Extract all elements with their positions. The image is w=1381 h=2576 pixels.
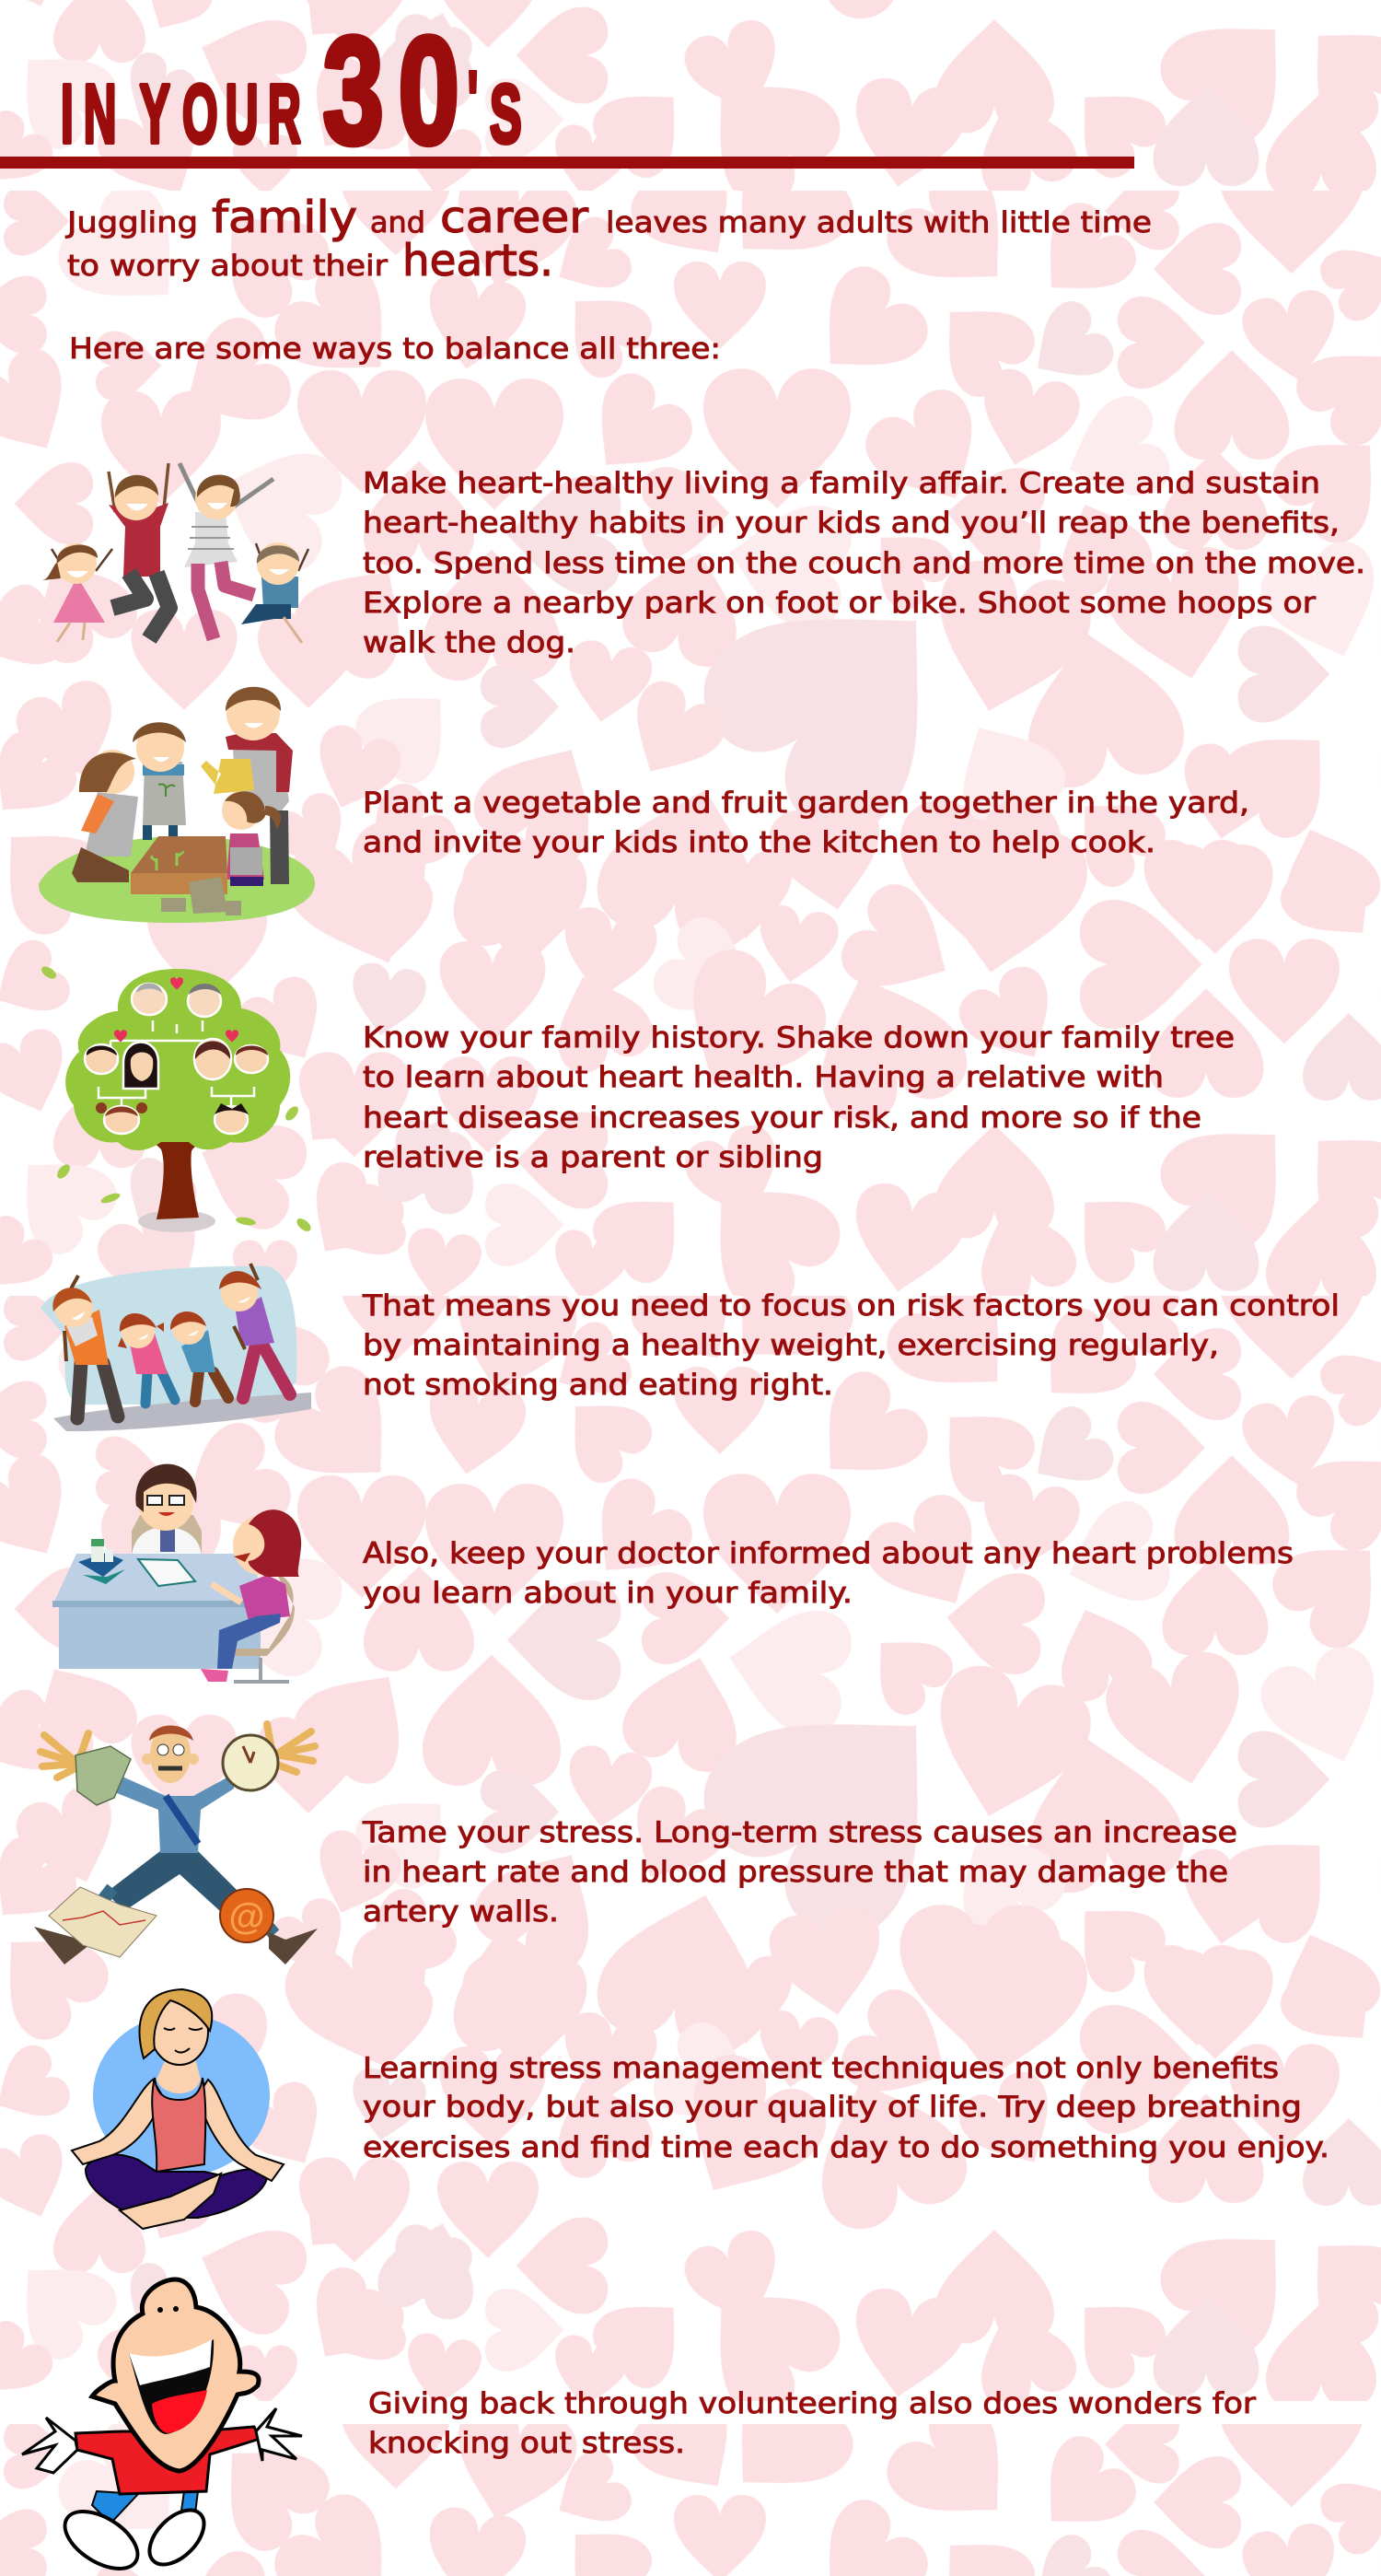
father bbox=[109, 463, 169, 639]
patient bbox=[201, 1509, 301, 1682]
girl bbox=[118, 1313, 175, 1404]
shoes bbox=[34, 1927, 89, 1964]
text: family affair: Explore a nearby park on foot or bike. Shoot some hoops or bbox=[363, 587, 1316, 620]
at sign badge: @ bbox=[228, 1896, 265, 1937]
clipboard bbox=[138, 1559, 195, 1586]
tank top bbox=[152, 2078, 205, 2172]
text: stress management bbox=[363, 2052, 1329, 2164]
father with watering can bbox=[226, 687, 293, 884]
icon: meditating woman bbox=[72, 1989, 284, 2229]
shirt and arms bbox=[75, 2427, 260, 2494]
text: family history: Know your family history. Shake down your family tree bbox=[363, 1021, 1235, 1055]
text: family affair: heart-healthy habits in your kids and you’ll reap the benefits, bbox=[363, 507, 1340, 540]
intro text: family bbox=[212, 192, 357, 243]
intro text: Here are some ways to balance all three: bbox=[69, 332, 721, 366]
nose bbox=[157, 2307, 163, 2313]
falling leaves bbox=[40, 964, 313, 1234]
father bbox=[52, 1276, 118, 1418]
hands bbox=[22, 2408, 302, 2473]
mother bbox=[219, 1264, 290, 1398]
woman kneeling bbox=[72, 750, 138, 882]
text: risk factors: not smoking and eating right. bbox=[363, 1369, 833, 1402]
head bbox=[142, 1726, 199, 1783]
text: risk factors: That means you need to focus on risk factors you can control bbox=[362, 1289, 1340, 1323]
text: volunteering: Giving back through volunteering also does wonders for bbox=[368, 2387, 1256, 2420]
intro text: Juggling bbox=[65, 206, 198, 239]
mouth bbox=[129, 2339, 214, 2434]
clock bbox=[223, 1735, 278, 1790]
boy bbox=[170, 1311, 228, 1402]
watering can bbox=[201, 759, 254, 794]
text: family affair: too. Spend less time on the couch and more time on the move. bbox=[363, 547, 1365, 580]
text: stress bbox=[362, 1816, 1237, 1929]
text: risk factors: by maintaining a healthy weight, exercising regularly, bbox=[363, 1329, 1219, 1362]
boy with seedling bbox=[133, 722, 186, 840]
family tree faces bbox=[85, 984, 268, 1134]
text: family affair: Make heart-healthy living a family affair. Create and sustain bbox=[363, 467, 1320, 500]
text: doctor: you learn about in your family. bbox=[363, 1577, 853, 1610]
icon: family tree bbox=[40, 964, 313, 1234]
title rule bbox=[0, 157, 1134, 169]
neck and shoulders bbox=[157, 2058, 201, 2093]
text: family affair: walk the dog. bbox=[363, 626, 575, 659]
text: family history: heart disease increases your risk, and more so if the bbox=[363, 1102, 1201, 1135]
text: volunteering: knocking out stress. bbox=[368, 2427, 685, 2460]
icon: doctor and patient bbox=[52, 1464, 301, 1682]
planter box bbox=[131, 836, 227, 894]
text: stress management: Learning stress management techniques not only benefits bbox=[363, 2052, 1279, 2085]
intro text: hearts. bbox=[402, 236, 553, 286]
intro text: and bbox=[370, 206, 425, 239]
legs bbox=[92, 2491, 198, 2528]
text: stress: Tame your stress. Long-term stress causes an increase bbox=[362, 1816, 1237, 1849]
money bbox=[75, 1746, 131, 1805]
text: family history: relative is a parent or sibling bbox=[363, 1141, 823, 1174]
text: stress: in heart rate and blood pressure that may damage the bbox=[363, 1856, 1228, 1889]
girl bbox=[42, 543, 112, 642]
icon: family gardening bbox=[39, 687, 315, 923]
mother bbox=[180, 463, 273, 639]
text: risk factors bbox=[362, 1289, 1340, 1402]
text: stress management: your body, but also your quality of life. Try deep breathing bbox=[363, 2091, 1302, 2124]
intro text: career bbox=[440, 192, 589, 243]
map bbox=[49, 1887, 157, 1957]
feet bbox=[120, 2174, 221, 2229]
doctor bbox=[132, 1464, 202, 1556]
torso and arms bbox=[112, 1773, 234, 1853]
head bbox=[92, 2279, 259, 2471]
at sign badge bbox=[220, 1889, 273, 1942]
text: doctor: Also, keep your doctor informed about any heart problems bbox=[363, 1537, 1294, 1570]
intro text: leaves many adults with little time bbox=[606, 206, 1152, 239]
intro text bbox=[65, 192, 1152, 366]
text: garden: Plant a vegetable and fruit garden together in the yard, bbox=[363, 787, 1249, 820]
hands bbox=[41, 1724, 315, 1778]
books and bottles bbox=[78, 1539, 125, 1584]
icon: stressed man bbox=[34, 1724, 318, 1964]
text: family history: to learn about heart health. Having a relative with bbox=[363, 1061, 1164, 1094]
text: stress management: exercises and find time each day to do something you enjoy. bbox=[363, 2131, 1329, 2164]
desk bbox=[52, 1554, 261, 1669]
shoes bbox=[55, 2500, 147, 2576]
icon: laughing man bbox=[22, 2279, 302, 2576]
text: stress: artery walls. bbox=[363, 1895, 559, 1929]
text: garden: and invite your kids into the kitchen to help cook. bbox=[363, 826, 1155, 859]
girl bbox=[222, 791, 281, 886]
icon: family exercising bbox=[41, 1264, 311, 1431]
title: ' bbox=[467, 54, 479, 149]
title: 30 bbox=[323, 6, 459, 176]
pants bbox=[106, 1851, 253, 1920]
text: family affair bbox=[363, 467, 1365, 659]
text: volunteering bbox=[368, 2387, 1256, 2460]
intro text: to worry about their bbox=[67, 250, 388, 283]
title bbox=[61, 6, 522, 176]
title: IN YOUR bbox=[61, 68, 301, 160]
boy bbox=[241, 542, 308, 643]
text: family history bbox=[363, 1021, 1235, 1174]
arms bbox=[72, 2080, 162, 2164]
small hearts bbox=[114, 977, 238, 1043]
text: garden bbox=[363, 787, 1249, 859]
text: doctor bbox=[363, 1537, 1294, 1610]
legs bbox=[86, 2154, 267, 2218]
sack and tools bbox=[161, 877, 241, 915]
icon: jumping family bbox=[42, 463, 308, 643]
title: S bbox=[490, 67, 522, 160]
head bbox=[151, 1999, 208, 2065]
